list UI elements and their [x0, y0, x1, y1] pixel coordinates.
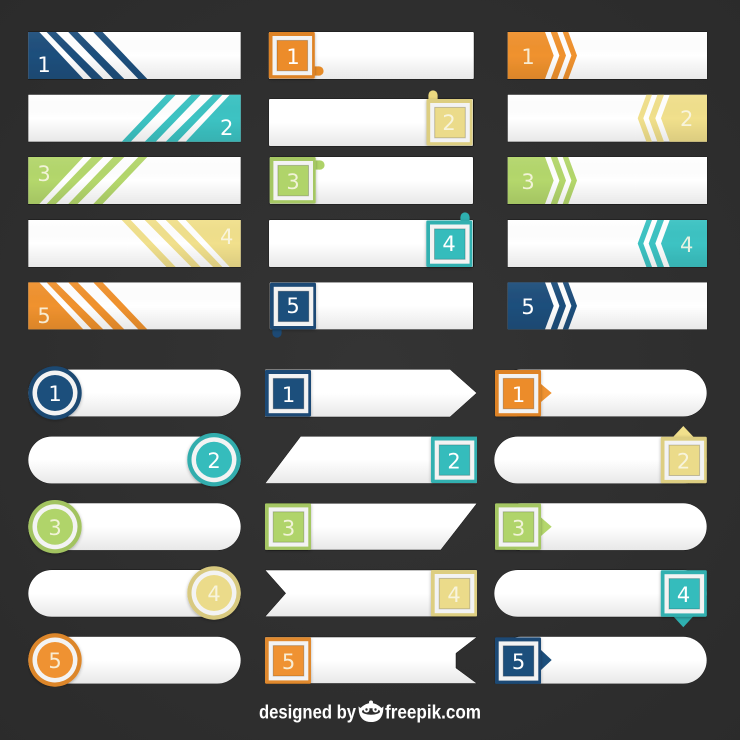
banner 5 blue chevrons: 5 [521, 295, 535, 319]
pill 2 teal: 2 [207, 449, 221, 473]
arrow banner 1 blue: 1 [282, 383, 295, 407]
pill 3 green [28, 500, 241, 553]
slanted banner 2 teal [265, 436, 477, 484]
notched banner 4 yellow: 4 [447, 583, 461, 607]
banner 1 orange chevrons: 1 [521, 45, 535, 69]
pointer pill 1 orange [495, 369, 707, 417]
footer credit [259, 700, 481, 724]
banner 2 teal stripes [28, 94, 241, 142]
banner 4 yellow stripes [28, 220, 241, 267]
panel: diagonal stripe banners [28, 32, 241, 330]
slanted banner 3 green [265, 503, 477, 550]
banner 2 yellow tab [269, 90, 474, 146]
banner 1 orange tab: 1 [286, 45, 300, 69]
banner 3 green tab: 3 [286, 170, 300, 194]
credit text right: freepik.com [385, 702, 481, 724]
pointer pill 3 green: 3 [512, 516, 525, 540]
banner 4 teal chevrons: 4 [680, 233, 693, 257]
icon: freepik mascot [358, 700, 384, 722]
pill 5 orange: 5 [48, 649, 62, 673]
panel: pill banners with pointer badges [494, 369, 707, 684]
notched banner 5 orange [265, 637, 477, 684]
banner 4 teal chevrons [507, 220, 707, 267]
pill 2 teal [28, 433, 241, 486]
banner 4 teal tab [269, 212, 474, 267]
pointer pill 2 yellow: 2 [677, 450, 690, 474]
banner 3 green stripes: 3 [37, 162, 51, 186]
banner 5 blue tab [269, 282, 473, 338]
slanted banner 3 green: 3 [282, 516, 295, 540]
slanted banner 2 teal: 2 [447, 450, 461, 474]
credit text left: designed by [259, 702, 356, 724]
pointer pill 5 blue: 5 [512, 650, 525, 674]
banner 4 teal tab: 4 [442, 232, 456, 256]
banner 2 yellow chevrons [507, 94, 707, 142]
banner 5 orange stripes [28, 282, 241, 330]
banner 3 green tab [269, 157, 473, 204]
notched banner 4 yellow [265, 570, 477, 617]
banner 2 yellow chevrons: 2 [680, 107, 693, 131]
pointer pill 4 teal: 4 [677, 583, 690, 607]
banner 3 green stripes [28, 157, 241, 204]
notched banner 5 orange: 5 [282, 650, 295, 674]
banner 4 yellow stripes: 4 [220, 225, 233, 249]
pointer pill 4 teal [494, 570, 707, 627]
pointer pill 5 blue [495, 636, 707, 684]
arrow banner 1 blue [265, 369, 477, 417]
banner 5 blue tab: 5 [286, 294, 300, 318]
banner 2 yellow tab: 2 [442, 111, 456, 135]
pointer pill 2 yellow [494, 426, 707, 484]
pill 1 blue: 1 [48, 382, 62, 406]
banner 3 green chevrons [507, 157, 707, 204]
pill 4 yellow: 4 [207, 582, 221, 606]
pill 4 yellow [28, 566, 241, 620]
pill 3 green: 3 [48, 516, 62, 540]
pointer pill 1 orange: 1 [512, 383, 525, 407]
pill 5 orange [28, 633, 241, 687]
banner 1 blue stripes: 1 [37, 53, 51, 77]
pill 1 blue [28, 366, 241, 420]
banner 3 green chevrons: 3 [521, 170, 535, 194]
panel: chevron banners [507, 32, 707, 330]
banner 2 teal stripes: 2 [220, 116, 233, 140]
panel: pill banners with round badges [28, 366, 241, 687]
pointer pill 3 green [495, 503, 707, 550]
banner 1 blue stripes [28, 32, 241, 79]
banner 5 blue chevrons [507, 282, 707, 330]
banner 5 orange stripes: 5 [37, 304, 51, 328]
banner 1 orange tab [268, 32, 474, 79]
panel: cut-shape banners [265, 369, 477, 684]
banner 1 orange chevrons [507, 32, 707, 79]
panel: square tab banners [268, 32, 474, 338]
